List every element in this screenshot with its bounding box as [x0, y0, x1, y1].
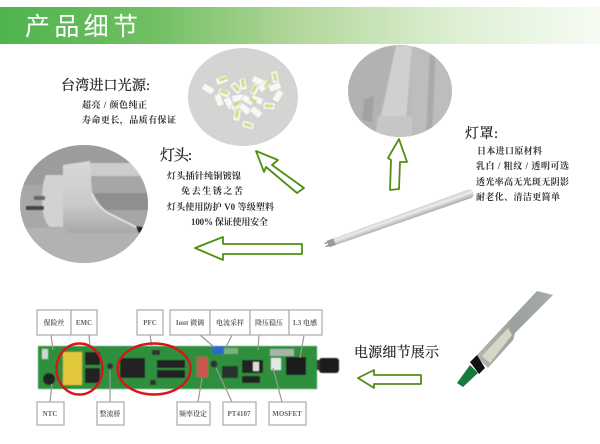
red highlight rings: [56, 344, 190, 394]
text block: Taiwan light source: 台湾进口光源:: [61, 77, 150, 94]
label boxes: 电流采样: [216, 318, 244, 327]
text block: lamp cover: 透光率高无光斑无阴影: [476, 176, 569, 187]
text: power supply detail: 电源细节展示: [354, 344, 440, 361]
label boxes: PT4107: [228, 410, 251, 418]
text block: lamp head: 灯头使用防护 V0 等级塑料: [166, 201, 274, 212]
label boxes: MOSFET: [272, 410, 302, 418]
photo: LED chips circle: [188, 48, 298, 146]
arrow: up to lamp cover: [388, 139, 407, 190]
arrow: to lamp head: [195, 237, 302, 260]
text block: Taiwan light source: [61, 77, 176, 126]
text block: lamp cover: 乳白 / 粗纹 / 透明可选: [476, 160, 569, 171]
text block: lamp cover: 灯罩:: [465, 126, 498, 142]
label boxes: EMC: [76, 319, 92, 327]
text block: Taiwan light source: 寿命更长，品质有保证: [82, 114, 176, 126]
photo: lamp head circle: [20, 145, 150, 264]
title: 产品细节: [25, 13, 138, 41]
text block: lamp cover: [465, 126, 569, 202]
text block: lamp head: 免去生锈之苦: [181, 185, 243, 196]
label boxes: L3 电感: [293, 318, 318, 327]
header banner: [0, 7, 600, 44]
text block: lamp head: 灯头插针纯铜镀镍: [166, 170, 241, 181]
text block: Taiwan light source: 超亮 / 颜色纯正: [82, 99, 147, 110]
label boxes: 整流桥: [100, 409, 120, 418]
circuit board diagram: [37, 310, 339, 425]
text block: lamp head: [160, 147, 274, 227]
arrow: to power supply: [358, 370, 421, 388]
leader lines: [50, 335, 304, 402]
label boxes: Iout 微调: [176, 318, 204, 327]
label boxes: 保险丝: [44, 318, 64, 327]
text block: lamp head: 灯头:: [160, 147, 192, 164]
text block: lamp cover: 耐老化、清洁更简单: [476, 191, 560, 202]
circuit board: [38, 346, 339, 389]
arrow: to LED chips: [256, 151, 304, 193]
photo: fluorescent tube: [324, 188, 475, 249]
photo: power module: [457, 291, 553, 387]
label boxes: 频率设定: [179, 409, 207, 418]
label boxes: NTC: [43, 410, 57, 418]
text block: lamp head: 100% 保证使用安全: [191, 216, 268, 227]
label boxes: 降压稳压: [255, 318, 283, 327]
photo: lamp cover circle: [348, 45, 452, 137]
label boxes: [37, 310, 322, 425]
text block: lamp cover: 日本进口原材料: [477, 145, 542, 156]
label boxes: PFC: [143, 319, 157, 327]
